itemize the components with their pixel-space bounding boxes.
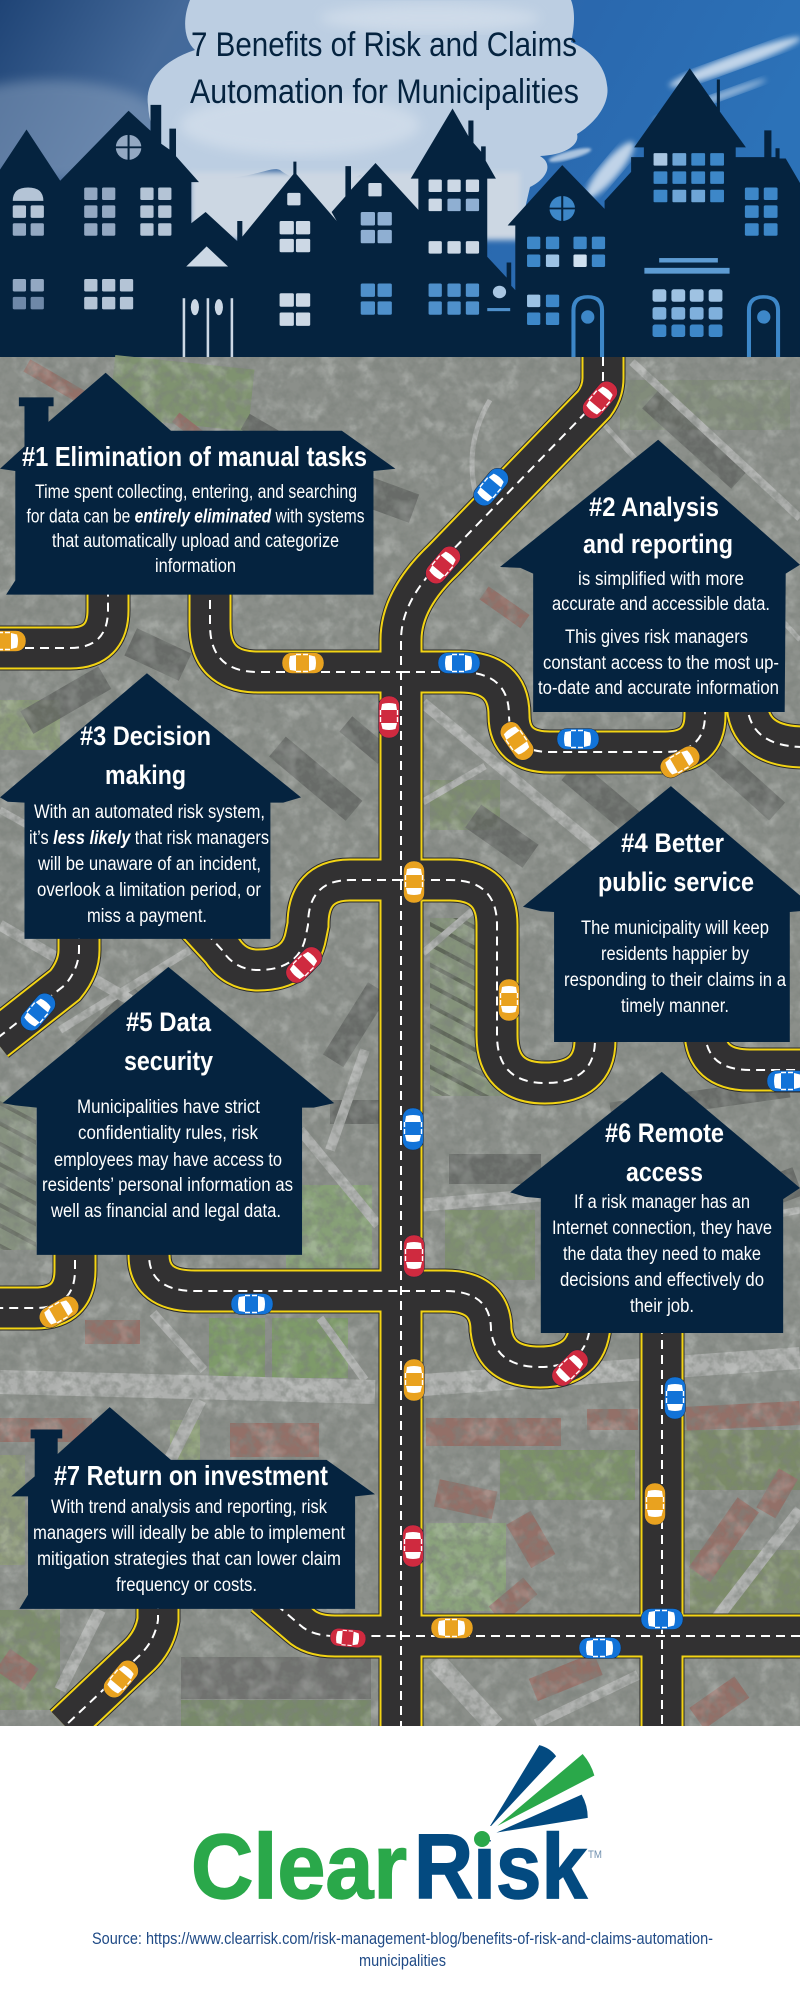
house shape: [3, 967, 334, 1255]
heading: public service: [598, 867, 754, 897]
body: [29, 802, 269, 927]
heading: security: [124, 1046, 213, 1076]
body: miss a payment.: [87, 906, 207, 927]
house shape: [510, 1072, 800, 1333]
body: decisions and effectively do: [560, 1270, 764, 1291]
aerial map background: [0, 355, 800, 1729]
green areas: [0, 355, 800, 1726]
cloud highlights: [180, 4, 540, 240]
source line: [92, 1930, 713, 1970]
body: [538, 569, 779, 699]
body: their job.: [630, 1296, 694, 1317]
body: This gives risk managers: [565, 627, 748, 648]
heading: #5 Data: [126, 1007, 212, 1037]
house shape: [523, 786, 800, 1042]
heading: [605, 1118, 724, 1187]
title: [190, 26, 579, 111]
body: is simplified with more: [578, 569, 744, 590]
heading: #1 Elimination of manual tasks: [22, 441, 367, 472]
body: residents happier by: [601, 944, 749, 965]
body: accurate and accessible data.: [552, 594, 770, 615]
body: Time spent collecting, entering, and searching: [35, 482, 357, 503]
body: information: [155, 556, 236, 577]
body: [33, 1497, 346, 1596]
round window frames: [115, 134, 576, 222]
body: With an automated risk system,: [34, 802, 265, 823]
panel 5: data security: [3, 967, 334, 1255]
heading: [124, 1007, 213, 1076]
body: overlook a limitation period, or: [37, 880, 262, 901]
body: confidentiality rules, risk: [78, 1123, 258, 1144]
house shape: [11, 1407, 375, 1609]
trademark: TM: [588, 1849, 602, 1861]
panel 2: analysis and reporting: [500, 440, 800, 712]
heading: #2 Analysis: [589, 492, 719, 522]
heading: [598, 828, 754, 897]
house shape: [0, 673, 301, 939]
darker rows of houses: [20, 389, 800, 1699]
streets: [0, 362, 800, 1726]
body: If a risk manager has an: [574, 1192, 750, 1213]
heading: and reporting: [583, 529, 733, 559]
body: The municipality will keep: [581, 918, 769, 939]
body: it’s less likely that risk managers: [29, 828, 269, 849]
heading: [583, 492, 733, 559]
house shape: [0, 373, 395, 595]
body: mitigation strategies that can lower claim: [37, 1549, 341, 1570]
heading: #3 Decision: [80, 721, 211, 751]
body: for data can be entirely eliminated with systems: [26, 506, 364, 528]
panel 1: elimination of manual tasks: [0, 373, 395, 595]
road network: [0, 357, 800, 1726]
body: the data they need to make: [563, 1244, 761, 1265]
body: will be unaware of an incident,: [37, 854, 261, 875]
icon: logo rays: [488, 1745, 594, 1833]
body: [552, 1192, 772, 1317]
panel 4: better public service: [523, 786, 800, 1042]
house skyline: [0, 68, 800, 358]
house shape: [500, 440, 800, 712]
panel 3: decision making: [0, 673, 301, 939]
footer background: [0, 1726, 800, 2000]
title: Automation for Municipalities: [190, 73, 579, 111]
body: timely manner.: [621, 996, 729, 1017]
cars: [0, 377, 800, 1702]
body: frequency or costs.: [116, 1575, 257, 1596]
source line: Source: https://www.clearrisk.com/risk-management-blog/benefits-of-risk-and-claims-automation-: [92, 1930, 713, 1948]
silhouette: [0, 68, 800, 358]
windows: left houses: [13, 135, 171, 309]
body: Internet connection, they have: [552, 1218, 772, 1239]
heading: #6 Remote: [605, 1118, 724, 1148]
logo i dot: [472, 1826, 492, 1847]
body: residents’ personal information as: [42, 1175, 293, 1196]
title: 7 Benefits of Risk and Claims: [191, 26, 577, 64]
wordmark: Clear: [191, 1816, 407, 1918]
body: Municipalities have strict: [77, 1097, 261, 1118]
cloud behind the title: [148, 0, 608, 230]
heading: [80, 721, 211, 790]
panel 7: return on investment: [11, 1407, 375, 1609]
heading: making: [105, 760, 186, 790]
source line: municipalities: [359, 1952, 446, 1970]
body: [564, 918, 786, 1017]
map texture: [0, 357, 800, 1726]
windows: centre houses: [183, 179, 479, 357]
heading: access: [626, 1157, 703, 1187]
windows: right houses: [527, 153, 778, 357]
body: With trend analysis and reporting, risk: [51, 1497, 327, 1518]
panel 6: remote access: [510, 1072, 800, 1333]
body: [26, 482, 364, 577]
body: managers will ideally be able to implement: [33, 1523, 346, 1544]
heading: #7 Return on investment: [54, 1460, 328, 1491]
sky background: [0, 0, 800, 360]
allotments: [430, 918, 515, 1096]
body: [42, 1097, 293, 1222]
heading: #4 Better: [621, 828, 724, 858]
body: well as financial and legal data.: [50, 1201, 281, 1222]
body: employees may have access to: [54, 1150, 282, 1171]
red roofs: [0, 359, 800, 1729]
ClearRisk logo: Risk: [414, 1816, 588, 1918]
body: that automatically upload and categorize: [52, 531, 339, 552]
ClearRisk logo: [191, 1745, 602, 1918]
